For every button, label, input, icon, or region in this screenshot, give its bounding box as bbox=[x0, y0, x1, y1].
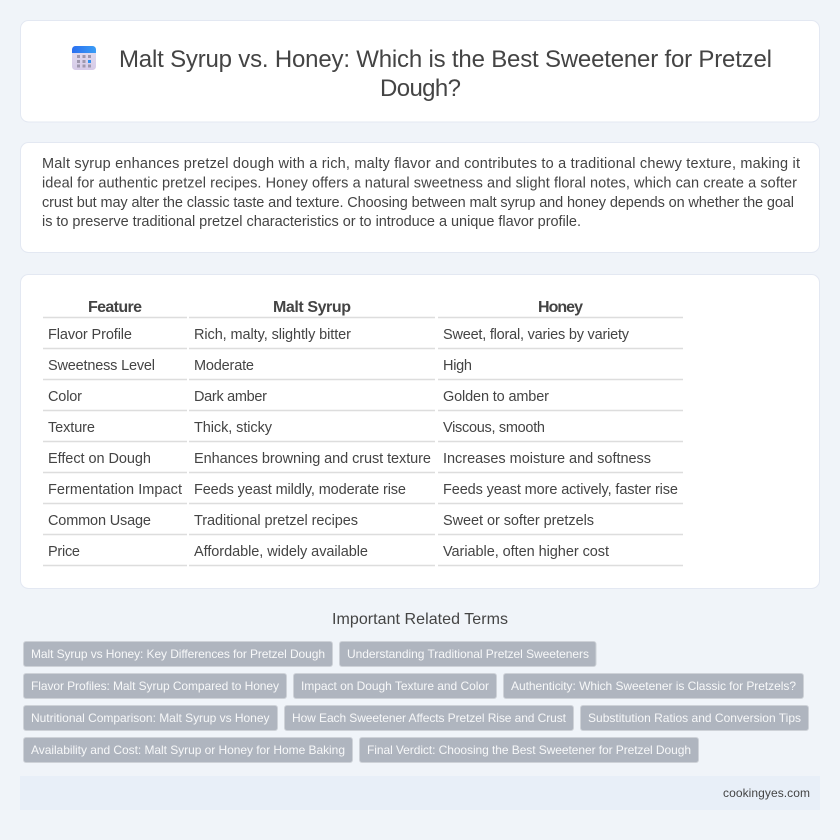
row: effect on dough: Increases moisture and softness bbox=[443, 451, 651, 467]
row: texture: Viscous, smooth bbox=[443, 420, 545, 436]
row: texture: Thick, sticky bbox=[194, 420, 273, 436]
table header row: Feature bbox=[88, 299, 142, 316]
tag: Substitution Ratios and Conversion Tips bbox=[588, 711, 801, 725]
tag: Flavor Profiles: Malt Syrup Compared to Honey bbox=[31, 679, 279, 693]
tag bbox=[24, 706, 278, 730]
intro text: is to preserve traditional pretzel characteristics or to introduce a unique flavor profile. bbox=[42, 214, 581, 230]
panel: title header bbox=[20, 20, 820, 122]
row: common usage: Sweet or softer pretzels bbox=[443, 513, 594, 529]
row: effect on dough bbox=[48, 451, 651, 467]
row: flavor profile: Sweet, floral, varies by variety bbox=[443, 327, 630, 343]
row: sweetness level: Moderate bbox=[194, 358, 254, 374]
row: texture bbox=[48, 420, 545, 436]
tag: Nutritional Comparison: Malt Syrup vs Honey bbox=[31, 711, 270, 725]
row: common usage: Common Usage bbox=[48, 513, 151, 529]
panel: related term tags bbox=[24, 642, 808, 762]
footer: cookingyes.com bbox=[723, 786, 810, 800]
row: price: Variable, often higher cost bbox=[443, 544, 609, 560]
row: texture: Texture bbox=[48, 420, 95, 436]
row: flavor profile bbox=[48, 327, 630, 343]
row: color bbox=[48, 389, 549, 405]
row: effect on dough: Effect on Dough bbox=[48, 451, 151, 467]
row: common usage: Traditional pretzel recipes bbox=[194, 513, 358, 529]
intro text bbox=[42, 156, 800, 230]
row: sweetness level: Sweetness Level bbox=[48, 358, 155, 374]
tag: Final Verdict: Choosing the Best Sweetener for Pretzel Dough bbox=[367, 743, 691, 757]
row: sweetness level bbox=[48, 358, 472, 374]
tag bbox=[24, 738, 352, 762]
tag: Authenticity: Which Sweetener is Classic for Pretzels? bbox=[511, 679, 796, 693]
title: Dough? bbox=[380, 75, 461, 102]
tag bbox=[360, 738, 698, 762]
row: effect on dough: Enhances browning and crust texture bbox=[194, 451, 431, 467]
tag bbox=[294, 674, 496, 698]
table header row: Honey bbox=[538, 299, 583, 316]
intro text: crust but may alter the classic taste and texture. Choosing between malt syrup and honey depends on whether the goal bbox=[42, 195, 794, 211]
row: price bbox=[48, 544, 609, 560]
intro text: Malt syrup enhances pretzel dough with a rich, malty flavor and contributes to a traditional chewy texture, making it bbox=[42, 156, 800, 172]
row: color: Color bbox=[48, 389, 82, 405]
footer bbox=[20, 776, 820, 810]
tag bbox=[24, 674, 286, 698]
tag: Availability and Cost: Malt Syrup or Honey for Home Baking bbox=[31, 743, 345, 757]
row: price: Price bbox=[48, 544, 80, 560]
row: sweetness level: High bbox=[443, 358, 472, 374]
panel: comparison table bbox=[20, 274, 820, 588]
tag: Malt Syrup vs Honey: Key Differences for Pretzel Dough bbox=[31, 647, 325, 661]
row: fermentation impact: Feeds yeast more actively, faster rise bbox=[443, 482, 678, 498]
tag bbox=[504, 674, 804, 698]
icon: calendar bbox=[72, 46, 96, 70]
table header row: Malt Syrup bbox=[273, 299, 351, 316]
tag: Understanding Traditional Pretzel Sweeteners bbox=[347, 647, 589, 661]
row: fermentation impact: Fermentation Impact bbox=[48, 482, 182, 498]
row: color: Golden to amber bbox=[443, 389, 549, 405]
row: color: Dark amber bbox=[194, 389, 267, 405]
row: flavor profile: Rich, malty, slightly bitter bbox=[194, 327, 351, 343]
panel: intro paragraph bbox=[20, 142, 820, 252]
tag bbox=[580, 706, 808, 730]
tag: How Each Sweetener Affects Pretzel Rise and Crust bbox=[292, 711, 567, 725]
tag bbox=[24, 642, 332, 666]
intro text: ideal for authentic pretzel recipes. Honey offers a natural sweetness and slight floral notes, which can create a softer bbox=[42, 176, 797, 192]
table header row bbox=[88, 299, 583, 316]
title: Malt Syrup vs. Honey: Which is the Best Sweetener for Pretzel bbox=[119, 46, 772, 73]
tag bbox=[284, 706, 574, 730]
row: flavor profile: Flavor Profile bbox=[48, 327, 132, 343]
row: common usage bbox=[48, 513, 594, 529]
row: fermentation impact: Feeds yeast mildly, moderate rise bbox=[194, 482, 406, 498]
tag bbox=[340, 642, 596, 666]
heading: related terms: Important Related Terms bbox=[332, 611, 508, 628]
tag: Impact on Dough Texture and Color bbox=[301, 679, 489, 693]
row: price: Affordable, widely available bbox=[194, 544, 368, 560]
title bbox=[119, 46, 772, 102]
row: fermentation impact bbox=[48, 482, 678, 498]
